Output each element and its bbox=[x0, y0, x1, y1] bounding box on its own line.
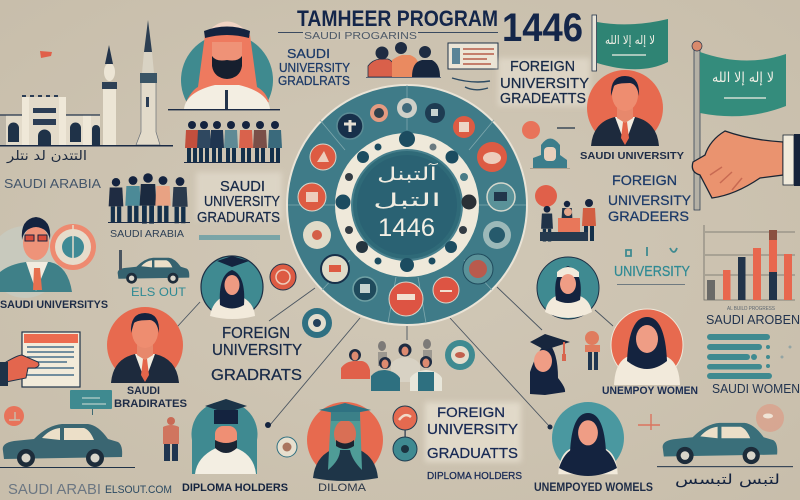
label: Saudi University Graduates left: SAUDI bbox=[220, 179, 265, 195]
icon: coral glow badge bbox=[756, 404, 784, 432]
label: Saudi University Graduates left: GRADURATS bbox=[197, 210, 280, 226]
1446 center: 1446 bbox=[378, 214, 435, 242]
label: Saudi Graduates bbox=[114, 385, 187, 410]
label: Foreign University Graduates right: FOREIGN bbox=[612, 172, 677, 188]
icon: small red flag bbox=[40, 51, 52, 58]
label: University: UNIVERSITY bbox=[614, 263, 690, 280]
small person orange bbox=[585, 331, 600, 370]
portrait: woman coral bbox=[611, 309, 683, 385]
icon: coral dot bbox=[522, 121, 540, 139]
label: Saudi University Graduates left: UNIVERSITY bbox=[204, 194, 280, 210]
label: Saudi Graduates: BRADIRATES bbox=[114, 398, 187, 410]
bar chart bbox=[704, 225, 795, 300]
portrait: diploma graduate on coral bbox=[307, 402, 383, 481]
people group: Saudi Arabia bbox=[108, 173, 190, 224]
label: Foreign University Graduates top: UNIVERSITY bbox=[500, 75, 589, 92]
teal streak bbox=[199, 235, 280, 240]
large car bbox=[0, 424, 135, 468]
portrait: woman teal bottom bbox=[552, 402, 624, 476]
central disc bbox=[352, 150, 462, 260]
label: Foreign University Graduates right: GRADEERS bbox=[608, 208, 689, 224]
linked icons bbox=[393, 406, 417, 461]
people cluster bottom center bbox=[341, 339, 442, 391]
portrait: woman teal bbox=[537, 257, 599, 319]
icon: coral badge left bbox=[270, 264, 296, 290]
icon: teal badge left bbox=[302, 308, 332, 338]
flag top bbox=[592, 15, 668, 71]
arabic wordmark line 2: التبل bbox=[373, 190, 441, 211]
label: Saudi University Graduates top bbox=[278, 46, 351, 88]
icon: small ring bbox=[277, 437, 297, 457]
label: Diploma Holders: DIPLOMA HOLDERS bbox=[182, 482, 288, 494]
label: Saudi University Graduates top: GRADLRATS bbox=[278, 74, 350, 88]
small person bbox=[163, 417, 179, 461]
title rule bbox=[278, 32, 498, 33]
people row bbox=[184, 121, 282, 163]
hooded figures bbox=[366, 42, 441, 78]
presenter group bbox=[535, 185, 596, 242]
flag top: لا إله إلا الله bbox=[605, 33, 655, 47]
portrait: man in keffiyeh bbox=[168, 22, 280, 110]
rule bbox=[617, 284, 685, 285]
outer ring bbox=[287, 85, 527, 325]
label: Foreign University Graduates left: FOREIGN bbox=[222, 325, 290, 342]
baseline bbox=[0, 145, 173, 146]
label: Foreign University Graduates bottom: DIPLOMA HOLDERS bbox=[427, 470, 522, 482]
label: Foreign University Graduates bottom bbox=[425, 402, 522, 482]
label: Saudi Universitys: SAUDI UNIVERSITYS bbox=[0, 299, 108, 311]
icon: teal badge right bbox=[445, 340, 475, 370]
label: Foreign University Graduates top: FOREIGN bbox=[510, 58, 575, 75]
portrait: graduate woman with cap bbox=[530, 334, 570, 395]
label: Saudi Graduates: SAUDI bbox=[127, 385, 160, 397]
portrait: graduate woman bbox=[201, 256, 263, 319]
center wheel bbox=[287, 85, 527, 325]
arabic wordmark: آلتبنل bbox=[377, 162, 438, 185]
label: Saudi Arabi: SAUDI ARABI bbox=[8, 481, 101, 498]
icon: small coral scale bbox=[638, 414, 660, 430]
outer icons bbox=[298, 98, 515, 316]
portrait: man with glasses bbox=[0, 217, 72, 298]
label: Foreign University Graduates right bbox=[608, 172, 692, 224]
label: Foreign University Graduates left: GRADRATS bbox=[211, 367, 302, 384]
label: Foreign University Graduates top: GRADEATTS bbox=[500, 90, 586, 107]
arabic caption: التتدن لد نتلر bbox=[6, 149, 87, 164]
label: Foreign University Graduates bottom: FOREIGN bbox=[437, 404, 505, 420]
label: Foreign University Graduates top bbox=[498, 58, 590, 107]
flag large with hand: لا إله إلا الله bbox=[712, 70, 774, 86]
script scribble bbox=[452, 78, 490, 90]
inner ring nodes bbox=[336, 131, 476, 272]
illustration: Saudi building and minarets bbox=[0, 20, 160, 145]
label: Foreign University Graduates bottom: UNIVERSITY bbox=[427, 422, 518, 438]
small arrow bbox=[557, 127, 575, 129]
connector lines bbox=[177, 287, 613, 427]
icon: coral badge bbox=[4, 406, 24, 426]
label: Foreign University Graduates bottom: GRADUATTS bbox=[427, 446, 518, 462]
subtitle: SAUDI PROGARINS bbox=[304, 31, 417, 42]
year: 1446 bbox=[502, 6, 583, 50]
label: Diploma: DILOMA bbox=[318, 482, 367, 494]
arrow dot bbox=[548, 424, 552, 430]
icon: teal hood bbox=[530, 138, 570, 169]
teal sign bbox=[70, 390, 112, 415]
label: Foreign University Graduates right: UNIVERSITY bbox=[608, 192, 692, 208]
label: Unemployed Womels: UNEMPOYED WOMELS bbox=[534, 482, 653, 494]
label: Saudi University Graduates left bbox=[196, 172, 282, 226]
label: Saudi University right: SAUDI UNIVERSITY bbox=[580, 150, 684, 162]
horizontal bars bbox=[707, 334, 792, 379]
label: Saudi University Graduates top: UNIVERSITY bbox=[279, 61, 351, 75]
document with hand bbox=[0, 332, 80, 387]
icon: small car bbox=[118, 250, 189, 284]
title: TAMHEER PROGRAM bbox=[297, 6, 498, 31]
portrait: suited man on coral bbox=[587, 70, 663, 146]
car right bbox=[657, 423, 793, 467]
mini glyph row bbox=[626, 247, 677, 256]
flag large with hand bbox=[692, 41, 800, 210]
label: Foreign University Graduates left: UNIVERSITY bbox=[212, 342, 302, 359]
small caption: AL BUILD PROGRESS bbox=[727, 306, 776, 312]
portrait: man on coral bbox=[107, 307, 183, 383]
label: Saudi Arabia: SAUDI ARABIA bbox=[4, 177, 102, 191]
info board bbox=[448, 43, 498, 69]
label: Foreign University Graduates left bbox=[211, 325, 302, 384]
label: Saudi Arabia small: SAUDI ARABIA bbox=[110, 228, 184, 240]
label: Saudi University Graduates top: SAUDI bbox=[287, 46, 330, 61]
label: ELS OUT: ELS OUT bbox=[131, 287, 186, 299]
icon: target ring bbox=[50, 224, 96, 270]
label: elsout.com: ELSOUT.COM bbox=[105, 484, 172, 496]
inner cream ring bbox=[335, 133, 479, 277]
portrait: diploma man bbox=[192, 399, 258, 474]
label: Unemploy Women: UNEMPOY WOMEN bbox=[602, 385, 698, 397]
icon: small dark dot bbox=[265, 422, 271, 428]
arabic caption bottom right: لتبس لتبسس bbox=[675, 472, 780, 488]
